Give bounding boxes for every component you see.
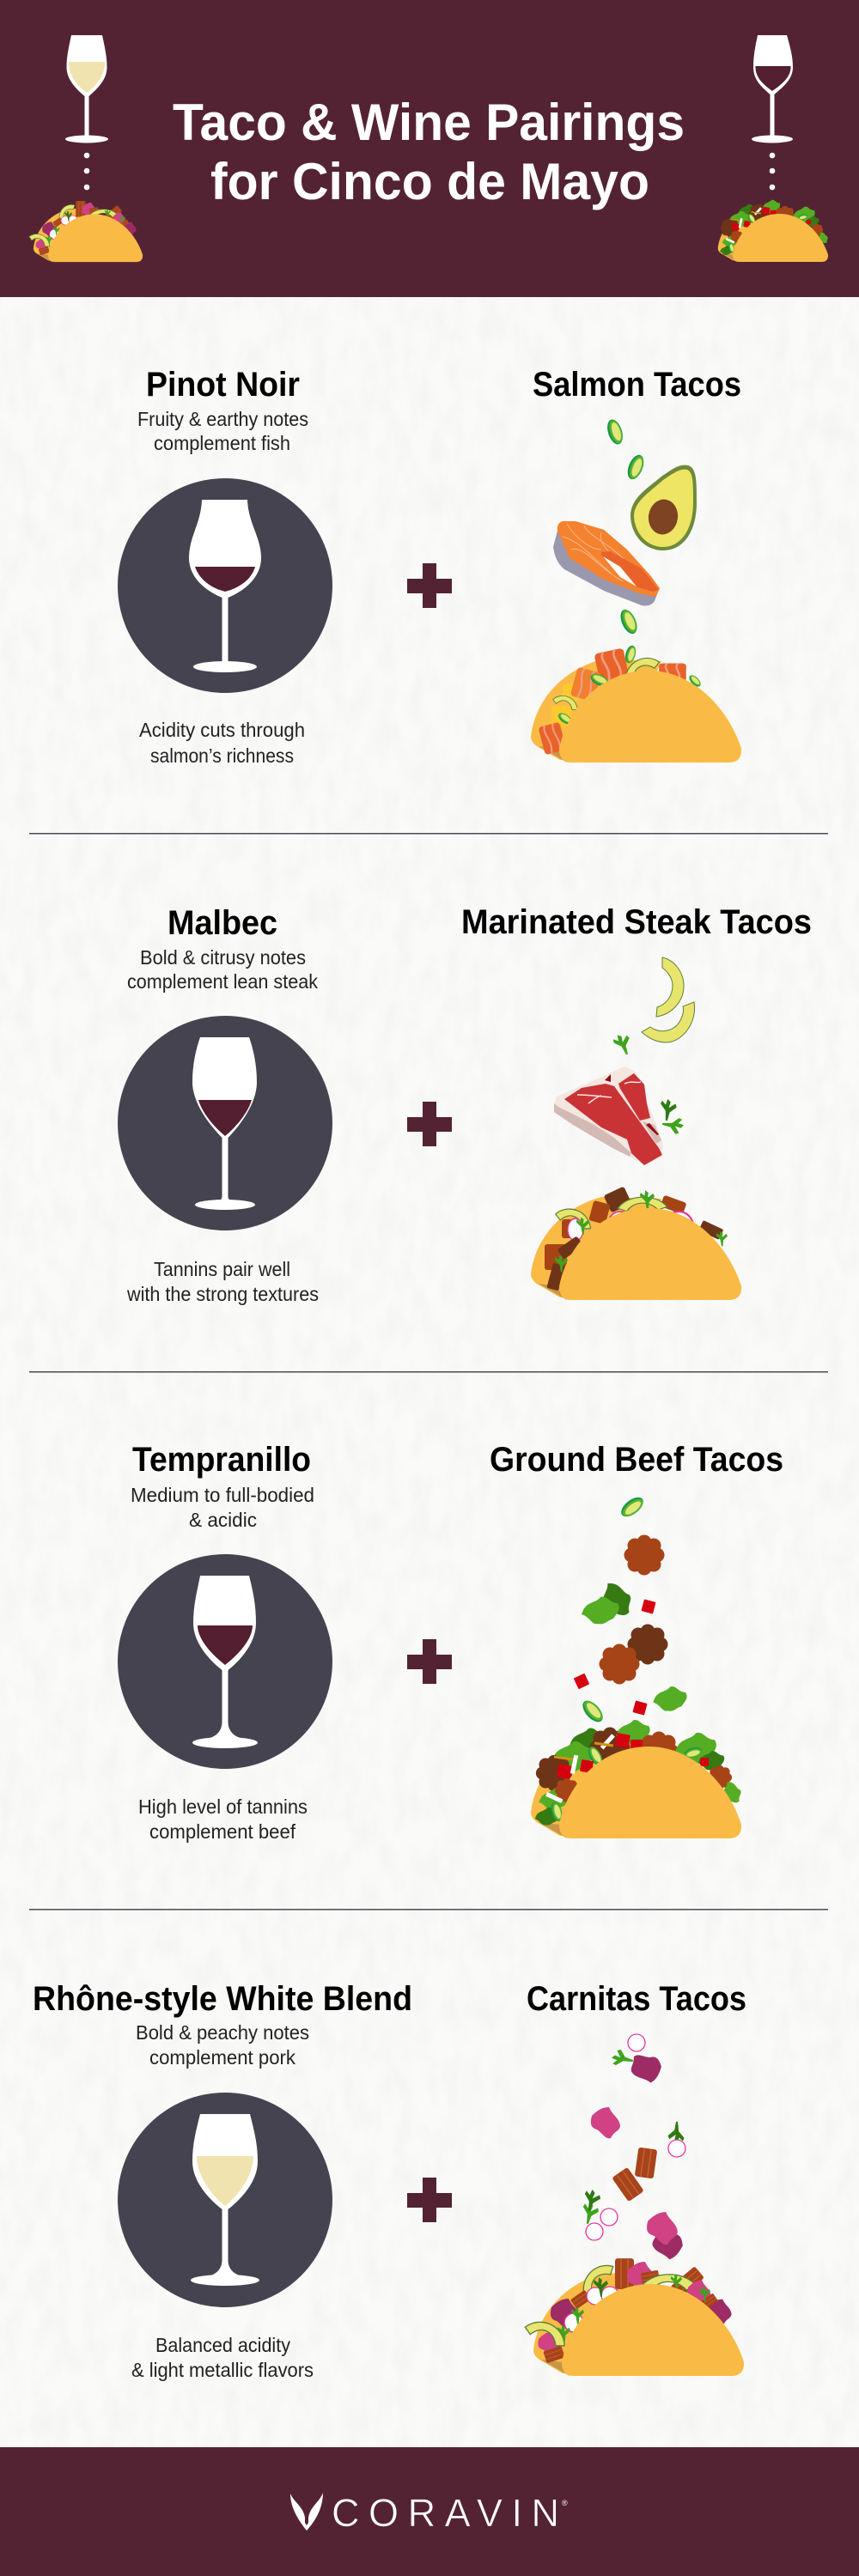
icon: plus xyxy=(407,2178,452,2222)
logo: Coravin wordmark: ® xyxy=(562,2499,568,2507)
text block: Pinot Noir notes xyxy=(137,408,308,454)
text block: Pinot Noir notes: Fruity & earthy notes xyxy=(137,408,308,430)
text block: Rhône acidity: Balanced acidity xyxy=(155,2334,290,2356)
heading: Carnitas Tacos: Carnitas Tacos xyxy=(527,1980,746,2018)
header banner xyxy=(0,0,859,297)
text block: Malbec tannins: Tannins pair well xyxy=(154,1258,290,1280)
title xyxy=(173,94,685,210)
divider xyxy=(29,1371,828,1372)
icon: salmon taco xyxy=(531,644,741,762)
icon: herbs xyxy=(612,1031,685,1135)
icon: salmon steak xyxy=(553,521,660,606)
icon: carnitas taco xyxy=(523,2258,744,2376)
text block: Rhône notes xyxy=(136,2021,309,2069)
text block: Rhône acidity xyxy=(131,2334,314,2381)
text block: Rhône notes: complement pork xyxy=(149,2046,295,2069)
icon: red wine glass, header right xyxy=(752,35,793,190)
heading: Rhône-style White Blend: Rhône-style White Blend xyxy=(33,1980,412,2018)
panel: Malbec and Marinated Steak Tacos xyxy=(118,903,812,1305)
divider xyxy=(29,833,828,835)
text block: Pinot Noir acidity xyxy=(139,719,305,767)
title: for Cinco de Mayo xyxy=(210,153,649,210)
icon: cucumber slices xyxy=(605,417,647,636)
logo: Coravin mark xyxy=(290,2493,323,2530)
icon: Pinot Noir glass in circle xyxy=(118,478,332,693)
text block: Tempranillo tannins xyxy=(138,1795,308,1843)
text block: Rhône notes: Bold & peachy notes xyxy=(136,2021,309,2044)
panel: Rhône-style White Blend and Carnitas Tacos xyxy=(33,1980,746,2381)
icon: plus xyxy=(407,1102,452,1146)
text block: Pinot Noir acidity: Acidity cuts through xyxy=(139,719,305,741)
text block: Pinot Noir acidity: salmon’s richness xyxy=(150,744,294,767)
icon: plus xyxy=(407,1639,452,1684)
icon: T-bone steak xyxy=(554,1066,663,1165)
icon: falling ground beef ingredients xyxy=(574,1493,687,1726)
icon: falling carnitas ingredients xyxy=(579,2034,686,2263)
heading: Pinot Noir: Pinot Noir xyxy=(146,366,300,404)
text block: Malbec tannins xyxy=(126,1258,319,1305)
icon: ground beef taco, header right xyxy=(718,200,829,262)
title: Taco & Wine Pairings xyxy=(173,94,685,151)
panel: Tempranillo and Ground Beef Tacos xyxy=(118,1441,783,1843)
icon: avocado half xyxy=(631,465,697,550)
text block: Malbec notes: Bold & citrusy notes xyxy=(140,946,306,969)
icon: white wine glass, header left xyxy=(65,35,108,190)
heading: Malbec: Malbec xyxy=(168,904,277,942)
icon: avocado slices xyxy=(642,957,695,1042)
footer banner xyxy=(0,2447,859,2576)
icon: plus xyxy=(407,563,452,608)
logo: Coravin wordmark: CORAVIN xyxy=(332,2491,559,2535)
text block: Malbec notes xyxy=(127,946,318,993)
text block: Tempranillo notes: & acidic xyxy=(189,1509,257,1531)
icon: carnitas taco, header left xyxy=(28,201,143,262)
text block: Malbec tannins: with the strong textures xyxy=(126,1283,319,1305)
icon: steak taco xyxy=(531,1187,741,1300)
text block: Tempranillo notes xyxy=(131,1484,314,1531)
divider xyxy=(29,1909,828,1910)
text block: Tempranillo tannins: High level of tannins xyxy=(138,1795,308,1818)
heading: Ground Beef Tacos: Ground Beef Tacos xyxy=(490,1441,783,1479)
icon: ground beef taco xyxy=(531,1720,743,1838)
heading: Tempranillo: Tempranillo xyxy=(132,1441,311,1479)
text block: Tempranillo tannins: complement beef xyxy=(149,1820,296,1843)
text block: Rhône acidity: & light metallic flavors xyxy=(131,2359,314,2381)
icon: Malbec glass in circle xyxy=(118,1016,332,1230)
text block: Pinot Noir notes: complement fish xyxy=(154,432,290,454)
text block: Malbec notes: complement lean steak xyxy=(127,970,318,993)
text block: Tempranillo notes: Medium to full-bodied xyxy=(131,1484,314,1506)
panel: Pinot Noir and Salmon Tacos xyxy=(118,366,741,767)
icon: Tempranillo glass in circle xyxy=(118,1554,332,1769)
icon: white wine glass in circle xyxy=(118,2093,332,2307)
heading: Salmon Tacos: Salmon Tacos xyxy=(533,366,741,404)
heading: Marinated Steak Tacos: Marinated Steak Tacos xyxy=(461,903,812,941)
